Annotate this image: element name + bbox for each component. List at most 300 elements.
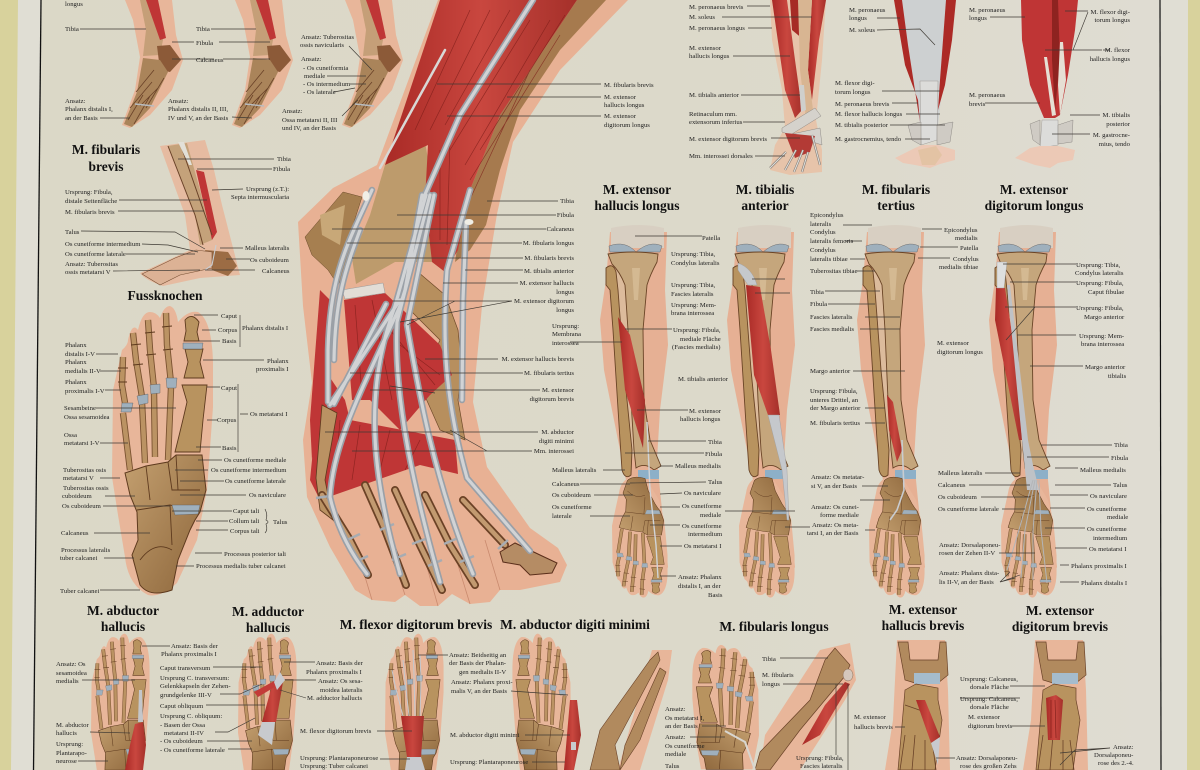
labels: top right views, right aligned: posterior (1106, 121, 1131, 128)
labels: Fussknochen (60, 313, 289, 595)
labels: Fussknochen: Phalanx distalis I (242, 325, 288, 332)
labels: top right views: M. gastrocnemius, tendo (835, 136, 902, 143)
labels: main foot: M. extensor hallucis (520, 280, 574, 287)
labels: M. extensor hallucis longus: Ursprung: (552, 323, 579, 330)
labels: top right views, right aligned: M. gastrocne- (1093, 132, 1130, 139)
labels: top left foot views: und IV, an der Basis (282, 125, 336, 132)
labels: M. extensor hallucis longus: Fascies lateralis (671, 291, 714, 298)
labels: Fussknochen: metatarsi I-V (64, 440, 100, 447)
labels: M. extensor hallucis longus: Patella (702, 235, 720, 242)
labels: top right views: M. peronaeus (969, 92, 1006, 99)
panel: M. fibularis brevis (65, 140, 291, 286)
heading: M. extensor (1000, 182, 1068, 197)
labels: M. extensor digitorum longus: Phalanx proximalis I (1071, 563, 1127, 570)
figure: foot and leg with muscle (512, 634, 672, 770)
labels: top right views: M. peronaeus longus (689, 25, 745, 32)
labels: M. fibularis longus: M. fibularis (762, 672, 794, 679)
labels: M. tibialis anterior (725, 279, 810, 527)
labels: M. fibularis tertius: Ansatz: Os metatar- (811, 474, 864, 481)
labels: M. extensor hallucis longus: M. extensor (689, 408, 722, 415)
labels: top right views, right aligned: torum longus (1095, 17, 1130, 24)
labels: M. fibularis brevis: Malleus lateralis (245, 245, 290, 252)
labels: M. adductor hallucis: grundgelenke III-V (160, 692, 212, 699)
labels: top right views: hallucis longus (689, 53, 730, 60)
heading (1012, 603, 1108, 634)
labels: M. fibularis tertius: Fibula (810, 301, 827, 308)
labels: main foot: M. tibialis anterior (524, 268, 575, 275)
labels: top left foot views: - Os intermedium (303, 81, 351, 88)
labels: M. extensor digitorum longus: rosen der Zehen II-V (939, 550, 995, 557)
leg muscles (385, 0, 577, 272)
labels: M. fibularis longus (665, 656, 848, 770)
labels: M. extensor hallucis longus: interossea (552, 340, 579, 347)
labels: main foot: Fibula (557, 212, 574, 219)
labels: M. abductor digiti minimi: Ursprung: Plantaraponeurose (450, 759, 528, 766)
labels: top right views: M. soleus (689, 14, 715, 21)
figure: ankle and foot with muscle (1023, 640, 1088, 770)
labels: Fussknochen: Processus lateralis (61, 547, 111, 554)
labels: M. fibularis longus: Tibia (762, 656, 776, 663)
heading: M. abductor (87, 603, 159, 618)
labels: Fussknochen: Phalanx (65, 359, 87, 366)
labels: M. fibularis tertius: Margo anterior (810, 368, 851, 375)
labels: M. flexor digitorum brevis (300, 652, 507, 770)
labels: M. adductor hallucis: moidea lateralis (320, 687, 363, 694)
labels: Fussknochen: Tuberositas ossis (63, 485, 109, 492)
labels: M. extensor digitorum brevis: Ursprung: Calcaneus, (960, 696, 1018, 703)
labels: M. extensor digitorum brevis: dorsale Fläche (970, 704, 1009, 711)
labels: M. fibularis longus: Os cuneiforme (665, 743, 705, 750)
labels: M. adductor hallucis: - Os cuneiforme laterale (160, 747, 225, 754)
labels: top right views, right aligned: M. flexor digi- (1090, 9, 1130, 16)
labels: top right views, right aligned: M. tibialis (1102, 112, 1130, 119)
labels: M. fibularis tertius: Ursprung: Fibula, (810, 388, 858, 395)
heading (72, 142, 140, 174)
heading: M. extensor (603, 182, 671, 197)
labels: M. adductor hallucis: metatarsi II-IV (164, 730, 204, 737)
labels: top left foot views: an der Basis (65, 115, 98, 122)
labels: upper leg muscles: M. extensor (604, 94, 637, 101)
labels: M. adductor hallucis: Ansatz: Basis der (316, 660, 364, 667)
labels: M. fibularis tertius: medialis (955, 235, 978, 242)
labels: M. extensor digitorum longus: M. extensor (937, 340, 970, 347)
labels: Fussknochen: Talus (273, 519, 288, 526)
labels: Fussknochen: Corpus tali (230, 528, 260, 535)
labels: main foot: M. extensor digitorum (514, 298, 575, 305)
labels: M. extensor digitorum longus: Phalanx distalis I (1081, 580, 1127, 587)
labels: Fussknochen: Phalanx (65, 342, 87, 349)
labels: M. fibularis tertius: Patella (960, 245, 978, 252)
figure: leg with muscle (857, 225, 925, 598)
figure: leg A front view (770, 0, 826, 175)
labels: Fussknochen: Os naviculare (249, 492, 286, 499)
labels: M. fibularis tertius (807, 212, 979, 537)
labels: M. extensor digitorum longus: Ursprung: Fibula, (1076, 305, 1124, 312)
labels: top left foot views: IV und V, an der Basis (168, 115, 229, 122)
panel: main foot illustration (298, 0, 628, 606)
heading: Fussknochen (127, 288, 203, 303)
labels: top left foot views: Fibula (196, 40, 213, 47)
labels: Fussknochen: Basis (222, 445, 237, 452)
panel: M. extensor digitorum brevis (960, 603, 1134, 770)
labels: M. fibularis tertius: Tuberositas tibiae (810, 268, 858, 275)
labels: M. extensor digitorum brevis: Ursprung: Calcaneus, (960, 676, 1018, 683)
labels: M. extensor digitorum longus: Malleus lateralis (938, 470, 983, 477)
labels: M. extensor digitorum brevis: rose des 2.-4. (1098, 760, 1134, 767)
labels: Fussknochen: Collum tali (229, 518, 259, 525)
labels: top right views, right aligned (1052, 9, 1131, 148)
labels: M. fibularis tertius: lateralis (810, 221, 832, 228)
labels: M. extensor hallucis longus: Calcaneus (552, 481, 580, 488)
panel: M. abductor hallucis (56, 603, 219, 770)
heading: M. abductor digiti minimi (500, 617, 650, 632)
labels: Fussknochen: Os metatarsi I (250, 411, 288, 418)
labels: M. extensor digitorum longus: brana interossea (1081, 341, 1124, 348)
labels: M. extensor digitorum longus: tibialis (1108, 373, 1127, 380)
labels: top left foot views: - Os laterale (303, 89, 336, 96)
labels: M. fibularis tertius: Condylus (810, 229, 836, 236)
labels: M. fibularis tertius: Ansatz: Os cunei- (811, 504, 859, 511)
labels: M. abductor hallucis: Ansatz: Os (56, 661, 86, 668)
labels: main foot: M. extensor hallucis brevis (502, 356, 574, 363)
labels: M. abductor hallucis: medialis (56, 678, 79, 685)
labels: M. fibularis tertius: medialis tibiae (939, 264, 978, 271)
heading: hallucis brevis (882, 618, 964, 633)
labels: top right views: torum longus (835, 89, 871, 96)
labels: Fussknochen: Os cuneiforme laterale (225, 478, 286, 485)
labels: M. fibularis brevis (65, 156, 291, 276)
labels: Fussknochen: Calcaneus (61, 530, 89, 537)
labels: Fussknochen: tuber calcanei (60, 555, 97, 562)
labels: M. extensor digitorum longus: Condylus lateralis (1075, 270, 1124, 277)
labels: M. fibularis longus: Ansatz: (665, 706, 686, 713)
labels: Fussknochen: Os cuboideum (62, 503, 102, 510)
labels: M. extensor hallucis longus: Os metatarsi I (684, 543, 722, 550)
labels: M. adductor hallucis: Ursprung C. obliquum: (160, 713, 222, 720)
labels: main foot: longus (556, 307, 574, 314)
labels: top right views, right aligned: M. flexor (1105, 47, 1131, 54)
labels: M. abductor digiti minimi: Ansatz: Phalanx proxi- (451, 679, 513, 686)
labels: main foot: longus (556, 289, 574, 296)
labels: M. extensor digitorum brevis: dorsale Fläche (970, 684, 1009, 691)
labels: top left foot views: mediale (304, 73, 325, 80)
labels: M. adductor hallucis: Caput transversum (160, 665, 211, 672)
panel: top left three foot views (65, 0, 403, 132)
labels: top right views: longus (849, 15, 867, 22)
labels: top right views: longus (969, 15, 987, 22)
labels: main foot: Tibia (560, 198, 574, 205)
metatarsal and toe bones (316, 405, 557, 590)
labels: M. extensor digitorum longus: Os cuneiforme (1087, 526, 1127, 533)
figure: foot with muscles (238, 634, 297, 770)
heading: M. fibularis (862, 182, 930, 197)
labels: top left foot views: Ansatz: (65, 98, 86, 105)
labels: M. extensor hallucis longus: Condylus lateralis (671, 260, 720, 267)
labels: M. adductor hallucis: Phalanx proximalis I (306, 669, 362, 676)
labels: M. extensor hallucis brevis: M. extensor (854, 714, 887, 721)
labels: M. fibularis brevis: ossis metatarsi V (65, 269, 111, 276)
labels: M. flexor digitorum brevis: Ansatz: Beidseitig an (449, 652, 507, 659)
figure: foot with muscle (385, 634, 444, 770)
labels: M. abductor hallucis: sesamoidea (56, 670, 87, 677)
labels: M. extensor hallucis longus: Ursprung: Tibia, (671, 282, 716, 289)
labels: M. extensor hallucis brevis (854, 714, 1017, 770)
labels: M. fibularis brevis: Septa intermuscularia (231, 194, 289, 201)
heading: M. adductor (232, 604, 304, 619)
heading: M. extensor (889, 602, 957, 617)
labels: M. extensor hallucis longus: Os cuneiforme (682, 523, 722, 530)
labels: top right views, right aligned: hallucis longus (1090, 56, 1130, 63)
figure: leg with muscle (989, 225, 1057, 598)
panel: M. extensor hallucis brevis (854, 602, 1017, 770)
labels: M. flexor digitorum brevis: Ursprung: Tuber calcanei (300, 763, 368, 770)
labels: M. fibularis brevis: Ursprung: Fibula, (65, 189, 113, 196)
labels: Fussknochen: Caput (221, 313, 237, 320)
labels: M. fibularis brevis: Fibula (273, 166, 290, 173)
heading (232, 604, 304, 635)
labels: main foot: Calcaneus (547, 226, 574, 233)
labels: M. fibularis tertius: Epicondylus (810, 212, 844, 219)
labels: M. abductor digiti minimi: malis V, an der Basis (451, 688, 507, 695)
labels: Fussknochen: Ossa sesamoidea (64, 414, 110, 421)
heading (87, 603, 159, 634)
labels: main foot: M. extensor (542, 387, 575, 394)
labels: top left foot views: longus (65, 1, 83, 8)
labels: main foot: M. fibularis brevis (524, 255, 574, 262)
labels: Fussknochen: Ossa (64, 432, 77, 439)
panel: M. abductor digiti minimi (450, 617, 672, 770)
labels: Fussknochen: distalis I-V (65, 351, 95, 358)
labels: M. extensor digitorum brevis: Dorsalaponeu- (1094, 752, 1133, 759)
labels: upper leg muscles: M. fibularis brevis (604, 82, 654, 89)
labels: M. extensor hallucis longus: (Fascies medialis) (672, 344, 720, 351)
labels: M. extensor hallucis longus: M. tibialis anterior (678, 376, 729, 383)
labels: top left foot views: Ansatz: (301, 56, 322, 63)
labels: M. abductor hallucis: Ansatz: Basis der (171, 643, 219, 650)
labels: M. adductor hallucis (160, 660, 364, 754)
heading: hallucis (246, 620, 290, 635)
labels: top left foot views (65, 1, 372, 132)
labels: M. adductor hallucis: Caput obliquum (160, 703, 204, 710)
labels: top right views: M. tibialis posterior (835, 122, 889, 129)
labels: Fussknochen: Corpus (218, 327, 238, 334)
heading: M. flexor digitorum brevis (340, 617, 492, 632)
labels: top right views: brevis (969, 101, 986, 108)
labels: M. extensor hallucis brevis: rose des großen Zehs (960, 763, 1017, 770)
labels: M. extensor hallucis longus: laterale (552, 513, 572, 520)
labels: top right views: Retinaculum mm. (689, 111, 737, 118)
labels: M. adductor hallucis: Ansatz: Os sesa- (318, 678, 363, 685)
labels: M. abductor hallucis: M. abductor (56, 722, 89, 729)
labels: M. extensor hallucis longus: distalis I, an der (678, 583, 721, 590)
skin outline (298, 0, 628, 606)
labels: top right views: M. soleus (849, 27, 875, 34)
labels: top left foot views: Phalanx distalis II, III, (168, 106, 228, 113)
figure: leg C deep back view (1015, 0, 1078, 168)
labels: M. fibularis tertius: lateralis tibiae (810, 256, 848, 263)
labels: M. fibularis brevis: Ursprung (z.T.): (246, 186, 289, 193)
labels: top right views: M. tibialis anterior (689, 92, 740, 99)
labels: M. abductor digiti minimi: M. abductor digiti minimi (450, 732, 520, 739)
labels: M. adductor hallucis: Ursprung C. transversum: (160, 675, 229, 682)
labels: upper leg muscles (604, 82, 654, 129)
labels: Fussknochen: Phalanx (267, 358, 289, 365)
labels: M. fibularis brevis: distale Seitenfläche (65, 198, 117, 205)
labels: main foot: digitorum brevis (530, 396, 574, 403)
labels: M. extensor digitorum brevis (960, 676, 1134, 767)
heading: M. tibialis (736, 182, 794, 197)
labels: top left foot views: ossis navicularis (300, 42, 344, 49)
labels: top right views: M. peronaeus (849, 7, 886, 14)
labels: M. extensor digitorum longus: mediale (1107, 514, 1128, 521)
figure: foot and leg with muscle (692, 643, 856, 770)
panel: M. extensor hallucis longus (552, 182, 729, 599)
labels: top right views: M. peronaeus brevis (689, 4, 744, 11)
figure: foot view 3 (342, 0, 403, 128)
heading: M. extensor (1026, 603, 1094, 618)
labels: M. extensor digitorum longus: intermedium (1093, 535, 1128, 542)
labels: M. fibularis tertius: Condylus (953, 256, 979, 263)
labels: Fussknochen: metatarsi V (63, 475, 94, 482)
panel: M. flexor digitorum brevis (300, 617, 507, 770)
labels: M. extensor digitorum longus: Malleus medialis (1080, 467, 1126, 474)
toe separations (360, 540, 500, 606)
labels: main foot: M. fibularis longus (523, 240, 574, 247)
labels: top right views: M. flexor digi- (835, 80, 875, 87)
labels: M. adductor hallucis: Gelenkkapseln der Zehen- (160, 683, 231, 690)
labels: M. fibularis tertius: si V, an der Basis (811, 483, 857, 490)
panel: M. fibularis tertius (807, 182, 979, 598)
labels: M. extensor digitorum longus: Os cuneiforme (1087, 506, 1127, 513)
labels: M. extensor digitorum longus: Ursprung: Mem- (1079, 333, 1124, 340)
labels: Fussknochen: Tuberositas osis (63, 467, 106, 474)
joint capsules (316, 496, 508, 566)
labels: M. fibularis tertius: unteres Drittel, an (810, 397, 859, 404)
labels: M. extensor hallucis longus: Ansatz: Phalanx (678, 574, 722, 581)
heading: tertius (877, 198, 915, 213)
labels: M. extensor digitorum longus: digitorum longus (937, 349, 983, 356)
figure: foot with muscle (91, 634, 150, 770)
labels: M. extensor digitorum longus: Margo anterior (1084, 314, 1125, 321)
labels: M. fibularis tertius: tarsi I, an der Basis (807, 530, 859, 537)
labels: M. abductor hallucis: Phalanx proximalis I (161, 651, 217, 658)
labels: M. extensor hallucis longus: mediale Fläche (680, 336, 721, 343)
labels: Fussknochen: cuboideum (62, 493, 93, 500)
labels: top left foot views: Tibia (65, 26, 79, 33)
labels: M. extensor digitorum longus: Os cuboideum (938, 494, 978, 501)
labels: top right views: M. extensor digitorum brevis (689, 136, 767, 143)
heading: M. fibularis longus (719, 619, 829, 634)
labels: M. fibularis longus: longus (762, 681, 780, 688)
labels: M. extensor hallucis longus: Talus (708, 479, 723, 486)
labels: M. fibularis brevis: Calcaneus (262, 268, 290, 275)
labels: M. extensor hallucis longus: hallucis longus (680, 416, 721, 423)
labels: M. extensor digitorum longus: Os metatarsi I (1089, 546, 1127, 553)
panel: M. extensor digitorum longus (937, 182, 1128, 598)
figure: leg with muscle (727, 225, 795, 598)
figure: foot bones (112, 306, 213, 596)
labels: M. extensor digitorum longus: Caput fibulae (1088, 289, 1124, 296)
labels: M. fibularis longus: Ansatz: (665, 734, 686, 741)
labels: M. fibularis tertius: der Margo anterior (810, 405, 861, 412)
panel: top right back and front leg views (689, 0, 1131, 175)
labels: M. fibularis tertius: Fascies medialis (810, 326, 854, 333)
labels: M. adductor hallucis: - Os cuboideum (160, 738, 204, 745)
labels: M. fibularis tertius: Tibia (810, 289, 824, 296)
labels: M. fibularis tertius: forme mediale (820, 512, 859, 519)
labels: M. extensor hallucis longus: intermedium (688, 531, 723, 538)
labels: top right views: M. extensor (689, 45, 722, 52)
labels: M. extensor digitorum longus: Calcaneus (938, 482, 966, 489)
labels: Fussknochen: Corpus (217, 417, 237, 424)
heading: M. fibularis (72, 142, 140, 157)
labels: top right views: M. peronaeus brevis (835, 101, 890, 108)
labels: M. flexor digitorum brevis: M. flexor digitorum brevis (300, 728, 372, 735)
labels: upper leg muscles: hallucis longus (604, 102, 645, 109)
labels: main foot: M. abductor (541, 429, 575, 436)
labels: top right views: Mm. interossei dorsales (689, 153, 753, 160)
heading: brevis (88, 159, 124, 174)
labels: M. fibularis longus: Fascies lateralis (800, 763, 843, 770)
labels: M. extensor hallucis longus: Ursprung: Mem- (671, 302, 716, 309)
labels: M. extensor hallucis longus: Malleus lateralis (552, 467, 597, 474)
labels: top left foot views: Calcaneus (196, 57, 224, 64)
labels: top left foot views: - Os cuneiformia (303, 65, 348, 72)
labels: top right views (689, 4, 1102, 160)
labels: M. fibularis tertius: Epicondylus (944, 227, 978, 234)
heading (862, 182, 930, 213)
labels: M. fibularis longus: an der Basis (665, 723, 698, 730)
labels: M. extensor digitorum longus: lis II-V, an der Basis (939, 579, 994, 586)
tibia band (455, 0, 606, 262)
labels: M. fibularis tertius: Ansatz: Os meta- (812, 522, 858, 529)
labels: top left foot views: Tibia (196, 26, 210, 33)
tarsal bones (410, 272, 465, 440)
labels: M. extensor digitorum longus: Ursprung: Fibula, (1076, 280, 1124, 287)
labels: top right views, right aligned: mius, tendo (1099, 141, 1131, 148)
labels: M. extensor digitorum longus: Ursprung: Tibia, (1076, 262, 1121, 269)
labels: M. extensor hallucis longus: Fibula (705, 451, 722, 458)
calcaneus and tibia bones (305, 142, 435, 285)
labels: M. extensor digitorum longus: Ansatz: Phalanx dista- (939, 570, 999, 577)
labels: M. extensor digitorum longus: Fibula (1111, 455, 1128, 462)
labels: M. fibularis longus: Ursprung: Fibula, (796, 755, 844, 762)
labels: M. fibularis brevis: Os cuneiforme intermedium (65, 241, 141, 248)
labels: M. fibularis tertius: lateralis femoris (810, 238, 854, 245)
labels: M. extensor digitorum longus: Tibia (1114, 442, 1128, 449)
labels: M. extensor hallucis longus: mediale (700, 512, 721, 519)
panel: M. tibialis anterior (725, 182, 810, 598)
labels: top right views: M. flexor hallucis longus (835, 111, 903, 118)
labels: Fussknochen: medialis II-V (65, 368, 101, 375)
heading (985, 182, 1083, 213)
labels: top left foot views: Ansatz: (282, 108, 303, 115)
labels: M. extensor hallucis longus: Basis (708, 592, 723, 599)
labels: top left foot views: Phalanx distalis I, (65, 106, 113, 113)
labels: main foot: Mm. interossei (534, 448, 574, 455)
labels: Fussknochen: Tuber calcanei (60, 588, 99, 595)
labels: top right views: M. peronaeus (969, 7, 1006, 14)
tendons (328, 0, 533, 582)
heading: digitorum longus (985, 198, 1083, 213)
labels: Fussknochen: Sesambeine (64, 405, 96, 412)
labels: Fussknochen: Basis (222, 338, 237, 345)
labels: M. extensor hallucis longus: Os naviculare (684, 490, 721, 497)
labels: M. extensor hallucis longus: brana interossea (671, 310, 714, 317)
labels: M. extensor digitorum brevis: digitorum brevis (968, 723, 1013, 730)
figure: ankle and foot with muscle (885, 640, 950, 770)
labels: M. extensor hallucis brevis: Ansatz: Dorsalaponeu- (956, 755, 1017, 762)
